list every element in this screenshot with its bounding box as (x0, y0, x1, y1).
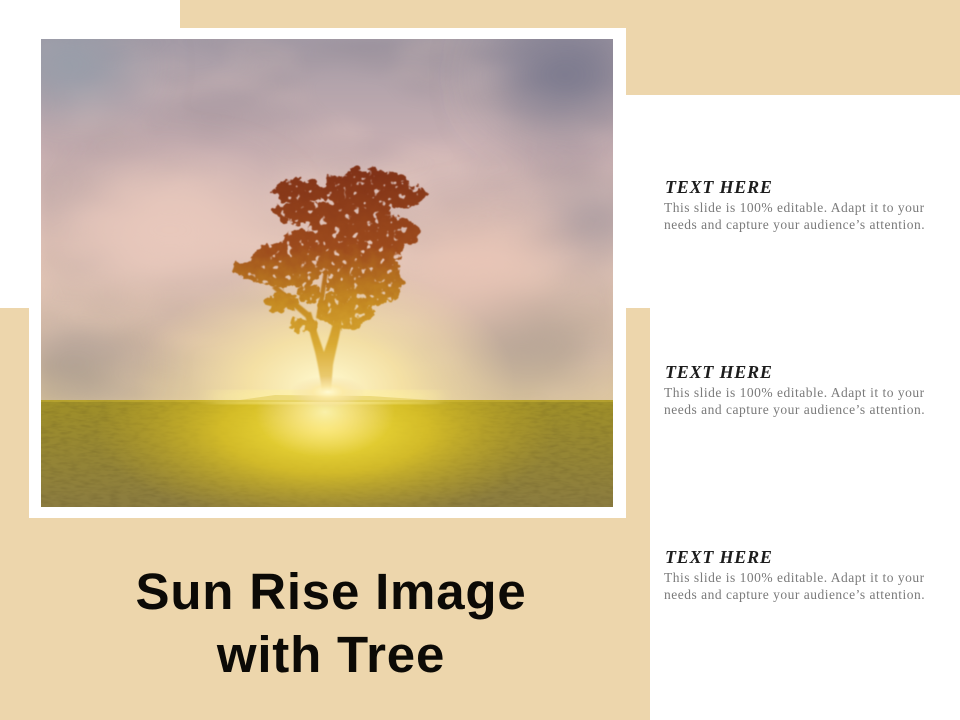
text block 3: TEXT HERE (665, 547, 773, 567)
text block 2: needs and capture your audience’s attention. (664, 402, 925, 417)
sky (41, 39, 613, 400)
photo: sunrise with tree in white frame (29, 28, 626, 518)
top beige banner (180, 0, 960, 95)
text block 1: TEXT HERE (665, 177, 773, 197)
bottom beige panel (0, 308, 650, 720)
text block 2: This slide is 100% editable. Adapt it to your (664, 385, 925, 400)
text block 2: TEXT HERE (665, 362, 773, 382)
tree trunk (272, 255, 353, 392)
text block 1: needs and capture your audience’s attention. (664, 217, 925, 232)
text block 2 (664, 362, 925, 417)
title (136, 563, 526, 683)
text block 3: This slide is 100% editable. Adapt it to your (664, 570, 925, 585)
title: Sun Rise Image (136, 563, 526, 620)
text block 3 (664, 547, 925, 602)
text block 3: needs and capture your audience’s attention. (664, 587, 925, 602)
ground (41, 390, 613, 507)
text block 1 (664, 177, 925, 232)
tree crown (235, 169, 425, 334)
text block 1: This slide is 100% editable. Adapt it to your (664, 200, 925, 215)
title: with Tree (217, 626, 445, 683)
sun glare at trunk base (297, 378, 359, 403)
